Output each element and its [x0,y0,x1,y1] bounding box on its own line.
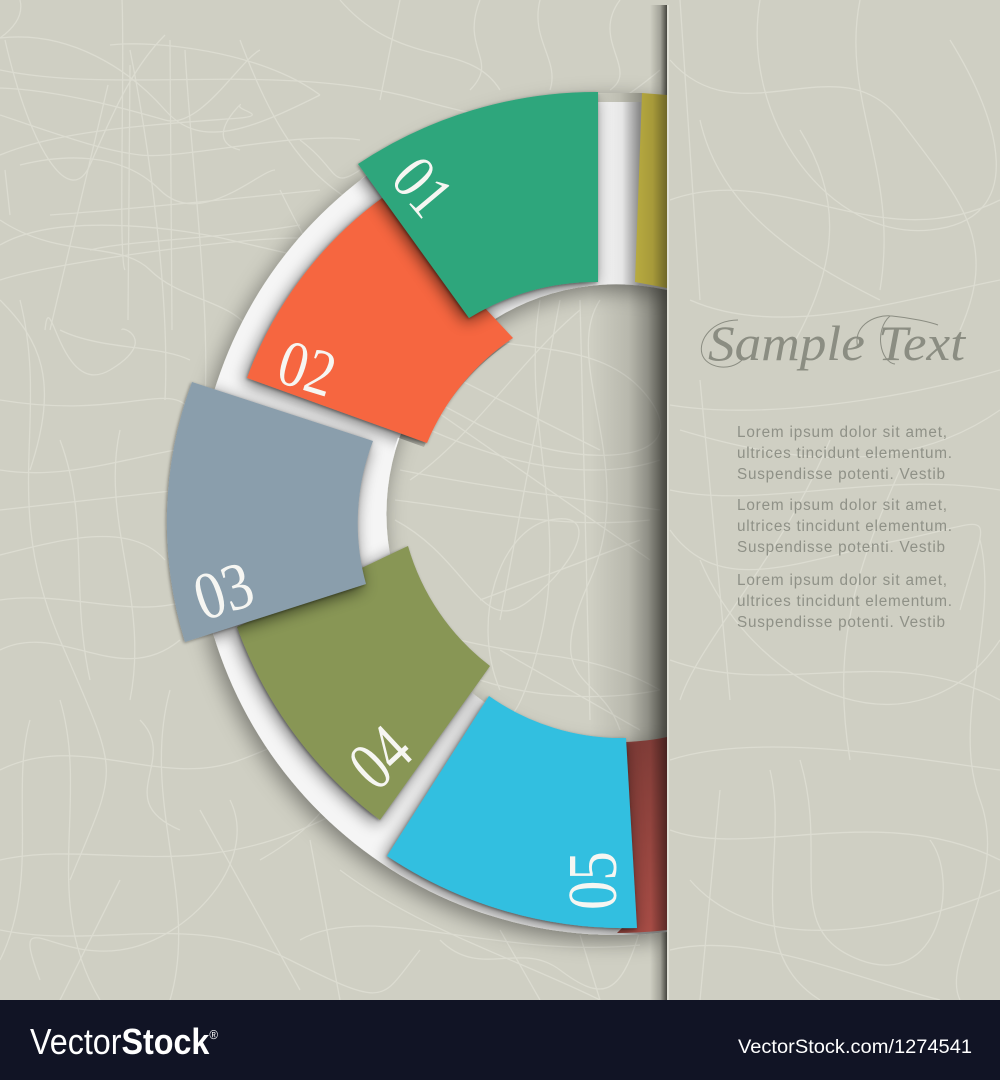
text block 2: Suspendisse potenti. Vestib [737,539,945,556]
heading: Sample Text: Sample Text [708,315,966,371]
top ring shadow band [598,93,642,102]
footer logo: VectorStock [30,1021,220,1062]
text block 1: Suspendisse potenti. Vestib [737,466,945,483]
footer bar [0,1000,1000,1080]
yellow tab [635,93,667,288]
right panel [667,5,966,1000]
footer logo: ® [209,1027,218,1042]
number 04: 04 [333,710,427,804]
segment 04 olive [234,546,490,824]
segment 05 blue [384,696,637,932]
text block 3 [737,572,952,631]
text block 3: ultrices tincidunt elementum. [737,593,952,610]
footer url: VectorStock.com/1274541 [738,1037,972,1058]
panel edge [667,5,669,1000]
text block 2: ultrices tincidunt elementum. [737,518,952,535]
number 05: 05 [553,851,631,910]
text block 1: Lorem ipsum dolor sit amet, [737,424,947,441]
numbers [184,143,631,910]
segment 01 green [355,92,598,322]
text block 2: Lorem ipsum dolor sit amet, [737,497,947,514]
segment 03 slate [164,382,373,646]
number 03: 03 [184,546,262,635]
text block 1: ultrices tincidunt elementum. [737,445,952,462]
text block 2 [737,497,952,556]
number 01: 01 [378,143,468,230]
text block 3: Lorem ipsum dolor sit amet, [737,572,947,589]
panel cast shadow [590,5,667,1000]
segment 02 orange [244,198,513,447]
heading swashes [701,316,938,367]
text block 3: Suspendisse potenti. Vestib [737,614,945,631]
text block 1 [737,424,952,483]
red tab [617,737,667,933]
number 02: 02 [270,327,344,412]
white ring [196,93,667,935]
